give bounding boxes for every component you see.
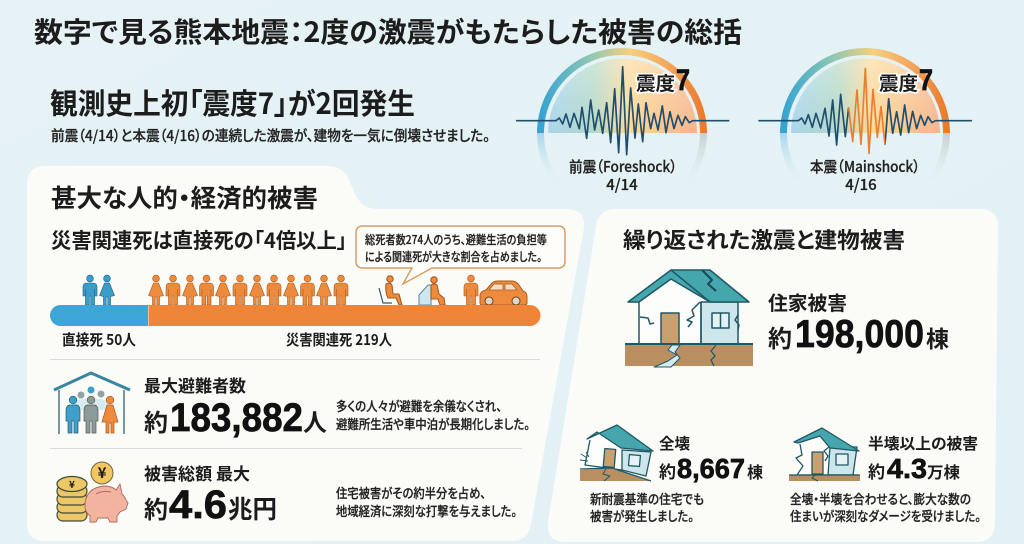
gauge: foreshock: 4/14 [606,174,638,195]
description: evacuees: 多くの人々が避難を余儀なくされ、 [336,396,502,415]
callout [356,226,565,284]
label: full collapse: 全壊 [659,432,690,454]
value: housing damage: 約 [768,319,792,354]
value: evacuees: 人 [303,403,327,438]
gauge: mainshock [758,52,972,195]
value: evacuees: 183,882 [170,396,303,440]
label: total damage: 被害総額 最大 [144,460,250,485]
description: damage: 住宅被害がその約半分を占め、 [336,483,486,502]
panel: building damage [548,209,998,542]
description: full collapse: 新耐震基準の住宅でも [590,489,704,508]
value: half collapse or more [868,453,960,484]
value: half collapse or more: 4.3 [887,453,927,484]
label: direct deaths: 直接死 50人 [62,329,136,350]
value: full collapse: 棟 [747,459,763,483]
description: evacuees [336,396,530,433]
description: half collapse or more: 住まいが深刻なダメージを受けました。 [790,506,981,525]
gauge: mainshock: 本震（Mainshock） [810,156,920,177]
icon: coins and piggy bank: ¥ [69,476,75,491]
title: 数字で見る熊本地震：2度の激震がもたらした被害の総括 [34,11,742,51]
callout: 総死者数274人のうち、避難生活の負担等 [365,231,547,248]
icon: person and car [464,275,527,305]
icon: damaged house [625,270,753,367]
description: damage [336,483,517,520]
heading: human and economic damage: 甚大な人的・経済的被害 [51,179,318,215]
icon: person in car seat [419,277,445,305]
bar: direct deaths [50,305,148,326]
gauge: foreshock: 前震（Foreshock） [569,156,677,177]
label: housing damage: 住家被害 [768,287,847,316]
people: related deaths [148,275,348,305]
value: half collapse or more: 万棟 [927,459,960,483]
people: direct deaths [83,275,114,305]
value: damage: 4.6 [169,483,227,527]
gauge: foreshock: 7 [676,64,690,97]
value: damage [144,483,277,527]
icon: evacuees in shelter [54,373,130,434]
bar: related deaths [148,305,540,326]
value: damage: 約 [144,490,168,525]
gauge: mainshock: 震度 [879,69,918,96]
icon: half collapsed house [789,428,860,481]
gauge: foreshock [516,52,729,195]
value: damage: 兆円 [228,490,277,526]
value: housing damage: 198,000 [795,313,924,356]
heading: building damage: 繰り返された激震と建物被害 [623,223,905,255]
value: full collapse: 8,667 [677,453,745,484]
value: full collapse: 約 [659,458,676,483]
description: half collapse or more [790,489,981,525]
icon: collapsed house [580,425,653,481]
heading: first observed double intensity 7: 観測史上初「震度7」が2回発生 [50,81,415,123]
description: full collapse: 被害が発生しました。 [590,506,694,525]
icon: seated evacuee [379,276,402,305]
description: full collapse [590,489,704,525]
value: full collapse [659,453,763,484]
icon: coins and piggy bank: ¥ [98,462,107,483]
intro text: 前震（4/14）と本震（4/16）の連続した激震が、建物を一気に倒壊させました。 [51,125,490,146]
description: damage: 地域経済に深刻な打撃を与えました。 [336,501,517,520]
subheading: related deaths: 災害関連死は直接死の「4倍以上」 [51,225,347,255]
gauge: foreshock: 震度 [636,69,675,96]
description: evacuees: 避難所生活や車中泊が長期化しました。 [336,414,530,433]
gauge: mainshock: 4/16 [845,174,877,195]
description: half collapse or more: 全壊・半壊を合わせると、膨大な数の [790,489,971,508]
label: related deaths: 災害関連死 219人 [286,329,392,350]
gauge: mainshock: 7 [919,64,933,97]
label: max evacuees: 最大避難者数 [144,372,246,397]
icon: coins and piggy bank [57,462,128,522]
value: half collapse or more: 約 [868,458,885,483]
label: half collapse or more: 半壊以上の被害 [868,432,978,454]
value: evacuees: 約 [144,403,168,438]
callout: による関連死が大きな割合を占めました。 [365,248,542,265]
value: housing damage: 棟 [926,320,949,354]
panel: human and economic damage [27,166,584,541]
